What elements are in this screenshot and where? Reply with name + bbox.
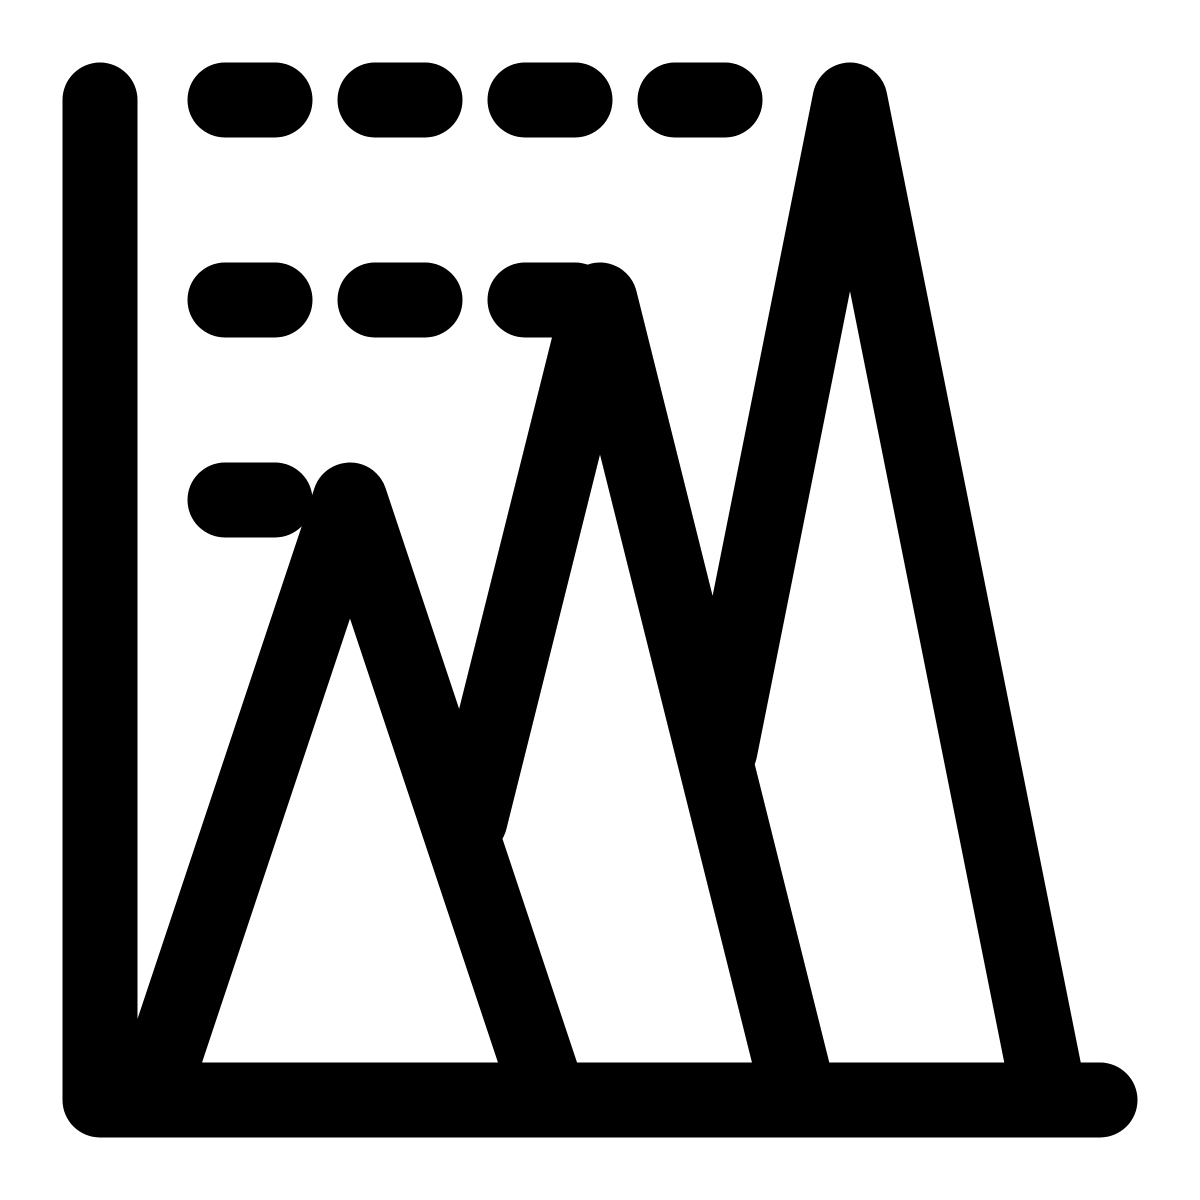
dashed guide line: top level [225,62,725,138]
peak: short front triangle [150,500,550,1100]
chart axes [100,100,1100,1100]
peak: middle triangle [470,300,800,1100]
peak: tall rear triangle [720,100,1050,1100]
dashed guide line: lower level [225,462,275,538]
dashed guide line: middle level [225,262,575,338]
